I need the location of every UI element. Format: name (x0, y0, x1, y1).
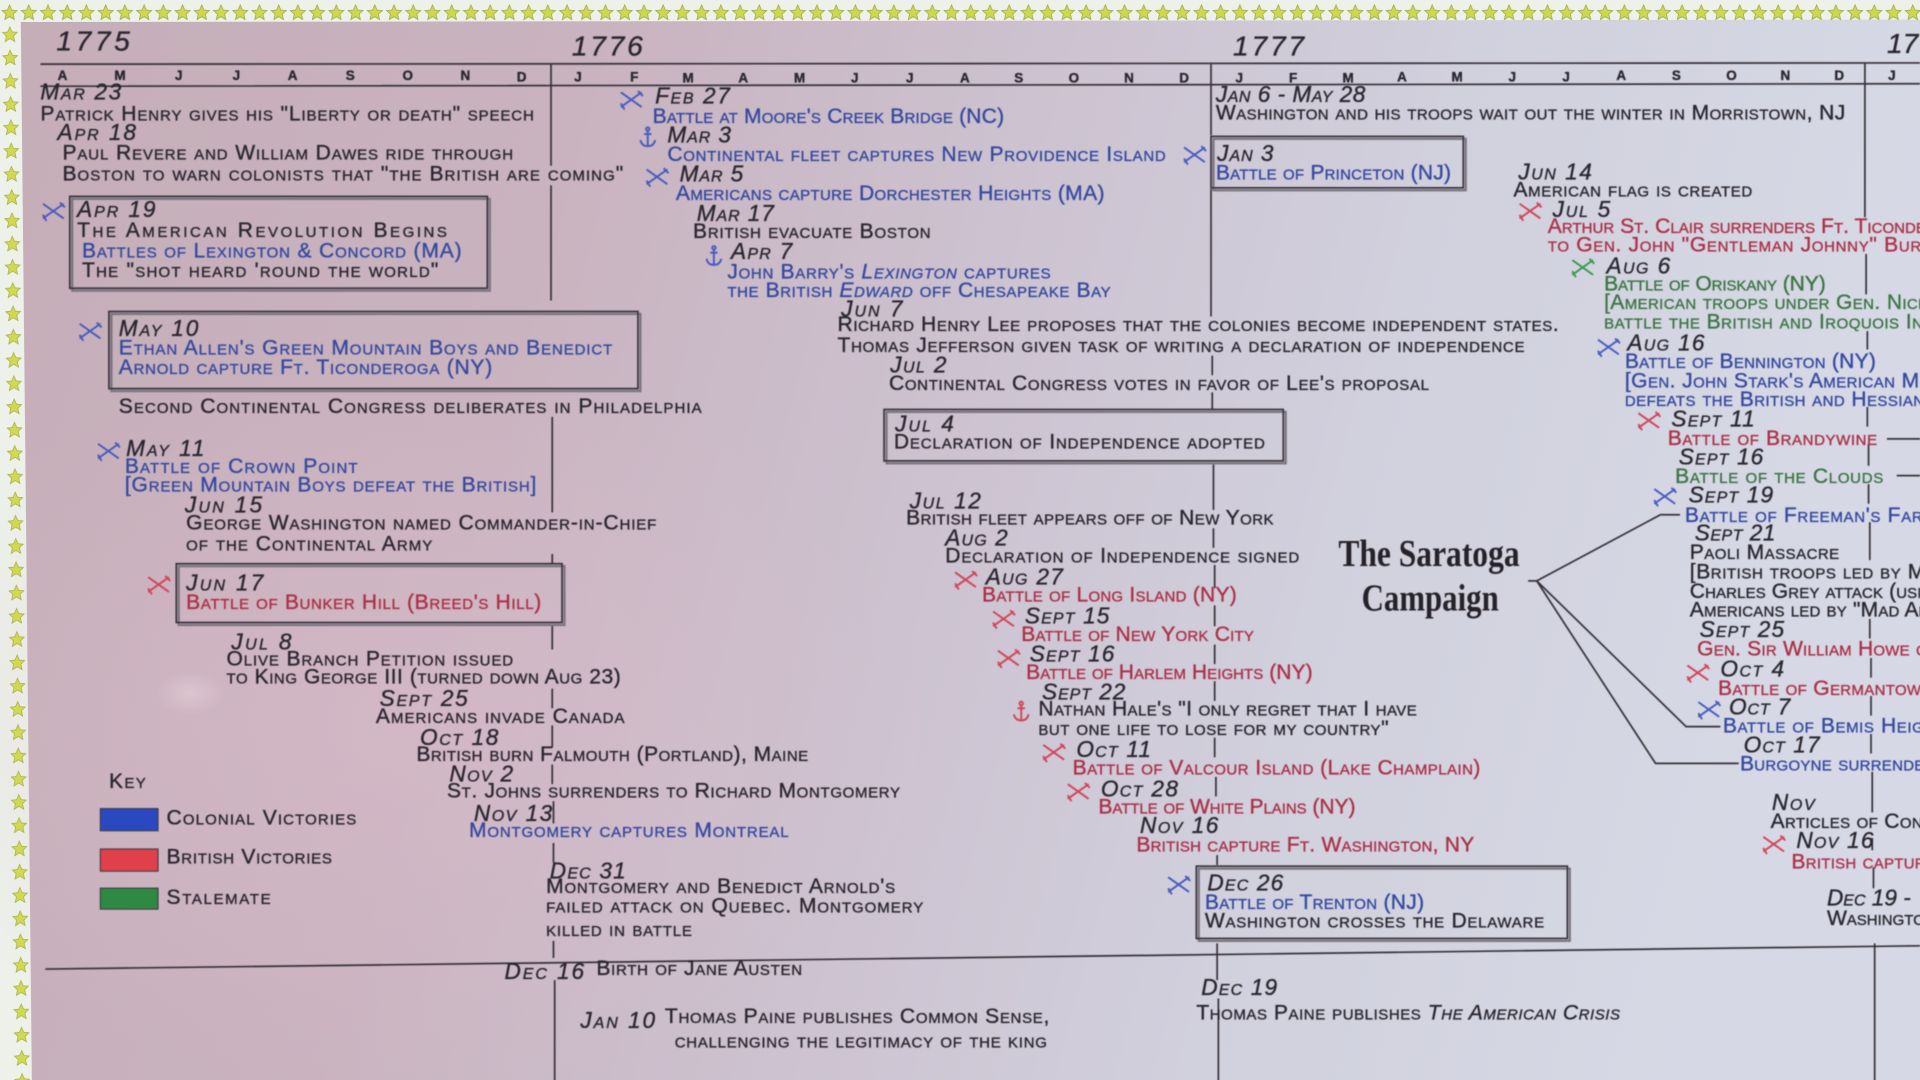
event: Jul 5 (1548, 196, 1920, 257)
text: Second Continental Congress: Second Continental Congress deliberates in Philadelphia (119, 395, 702, 418)
event: Dec 16 birth of Jane Austen: Birth of Jane Austen (596, 957, 802, 980)
icon: blue crossed sabres (1598, 338, 1620, 357)
event: Sept 22: Sept 22 (1042, 679, 1126, 705)
box: Jun 17: Jun 17 (185, 570, 265, 596)
event: Jul 12: British fleet appears off of New York (906, 507, 1273, 530)
year header: 1776 (572, 31, 643, 62)
event: Dec 31: Dec 31 (550, 857, 626, 883)
event: Jun 7: Richard Henry Lee proposes that the colonies become independent states. (838, 313, 1559, 336)
icon: red crossed sabres (1043, 744, 1065, 762)
event: Feb 27: Feb 27 (655, 82, 731, 108)
icon: red crossed sabres (993, 610, 1015, 629)
event: Mar 3: Continental fleet captures New Providence Island (667, 143, 1166, 166)
icon: blue crossed sabres (80, 323, 102, 341)
box: Dec 26: Dec 26 (1207, 870, 1284, 896)
month header: J (851, 71, 858, 86)
event: Oct 18: British burn Falmouth (Portland), Maine (416, 743, 808, 766)
event: Oct 7 (1723, 693, 1920, 738)
event: Sept 21: Sept 21 (1695, 519, 1776, 545)
month header: N (1780, 68, 1790, 83)
box: Jun 17: Battle of Bunker Hill (Breed's Hill) (186, 591, 541, 614)
event: May 11: [Green Mountain Boys defeat the British] (125, 474, 536, 497)
box: Apr 19: The "shot heard 'round the world" (82, 259, 438, 282)
month header: A (1397, 69, 1407, 84)
event: Nov 16 1776: Nov 16 (1140, 812, 1219, 838)
heading: The Saratoga Campaign: The Saratoga (1338, 533, 1520, 575)
month header: M (683, 71, 694, 86)
event: Aug 6: Battle of Oriskany (NY) (1604, 273, 1826, 296)
event: Nov: Nov (1772, 789, 1816, 815)
box: Jul 4: Declaration of Independence adopted (894, 431, 1265, 454)
event: Mar 23 (40, 79, 534, 125)
event: Dec 16 birth of Jane Austen (504, 957, 802, 984)
event: Jul 8: to King George III (turned down Aug 23) (227, 666, 621, 689)
event: Sept 25: Sept 25 (380, 685, 468, 711)
event: Jun 15: Jun 15 (184, 491, 262, 517)
event: Nov 2: Nov 2 (449, 761, 513, 787)
event: Apr 18: Paul Revere and William Dawes ride through (62, 142, 513, 165)
event: Aug 2 (943, 524, 1299, 568)
box: Apr 19: Battles of Lexington & Concord (MA) (82, 240, 462, 263)
arrow: Saratoga connector lines (1528, 515, 1739, 763)
event: Jun 14 (1513, 158, 1752, 201)
month header: J (175, 68, 183, 83)
box: Jul 4: Jul 4 (894, 411, 954, 437)
icon: red anchor (1014, 702, 1029, 720)
icon: red crossed sabres (1763, 836, 1785, 854)
event: Mar 5 (676, 161, 1104, 205)
lower rule (45, 946, 1920, 969)
box: Jan 3: Battle of Princeton (NJ) (1216, 161, 1451, 184)
event: Sept 25 1777: Sept 25 (1700, 616, 1784, 642)
event: Sept 11 (1668, 406, 1877, 450)
box: May 10 (109, 312, 640, 391)
event: Oct 17 (1740, 731, 1920, 776)
event: Sept 11: Battle of Brandywine (1668, 427, 1877, 450)
event: Oct 28 (1098, 775, 1356, 819)
month header: J (1235, 71, 1243, 86)
box: Apr 19: Apr 19 (75, 196, 156, 222)
event: Jul 5: Jul 5 (1552, 196, 1611, 222)
event: Jan 10 Common Sense: Jan 10 (579, 1007, 656, 1033)
month header: A (58, 68, 68, 83)
icon: green crossed sabres (1572, 259, 1594, 277)
icon: blue crossed sabres (1168, 876, 1190, 894)
event: Jul 8: Jul 8 (230, 628, 292, 654)
box: Dec 26: Washington crosses the Delaware (1205, 909, 1544, 932)
year header: 17 (1887, 28, 1920, 59)
event: Mar 17: British evacuate Boston (693, 220, 931, 243)
month header: J (1888, 68, 1896, 83)
event: Jan 6 - May 28: Jan 6 - May 28 (1215, 81, 1366, 107)
event: Sept 15: Sept 15 (1025, 603, 1110, 629)
event: Oct 18: Oct 18 (420, 724, 499, 750)
event: Sept 25: Americans invade Canada (376, 705, 624, 728)
icon: red crossed sabres (955, 571, 977, 589)
event: Sept 16: Sept 16 (1030, 641, 1115, 667)
box: Jun 17 (176, 564, 564, 625)
event: Apr 7 (727, 238, 1111, 302)
month header: D (1834, 68, 1844, 83)
event: Nov 16 1776: British capture Ft. Washington, NY (1136, 834, 1474, 857)
month header: N (1124, 71, 1134, 86)
event: Jul 8: Olive Branch Petition issued (227, 647, 513, 670)
event: Dec 31 (546, 857, 923, 941)
event: Dec 19 American Crisis: Thomas Paine publishes The American Crisis (1196, 1001, 1620, 1024)
event: Jun 14: Jun 14 (1517, 158, 1592, 184)
event: May 11: May 11 (126, 435, 204, 461)
legend: key: Colonial Victories (167, 807, 356, 830)
month header: D (1179, 71, 1189, 86)
event: Mar 3: Mar 3 (667, 122, 731, 148)
icon: red crossed sabres (1520, 203, 1542, 221)
event: Dec 31: Montgomery and Benedict Arnold's (546, 875, 895, 898)
event: Sept 22: Nathan Hale's "I only regret that I have (1038, 698, 1417, 721)
legend: key: Stalemate (167, 886, 271, 909)
month header: O (1726, 68, 1737, 83)
event: Apr 18: Boston to warn colonists that "the British are coming" (62, 162, 623, 185)
event: Sept 21: Paoli Massacre (1690, 541, 1839, 564)
event: Sept 25 (376, 685, 624, 728)
event: Aug 6: Aug 6 (1605, 253, 1671, 279)
event: May 11: Battle of Crown Point (125, 455, 358, 478)
event: Dec 19 (1827, 884, 1920, 930)
box: Apr 19 (70, 196, 490, 291)
event: Apr 7: the British Edward off Chesapeake Bay (727, 279, 1111, 302)
icon: red crossed sabres (1687, 664, 1709, 683)
event: Apr 18 (56, 119, 623, 185)
star border top (0, 4, 1920, 21)
event: Jun 15: George Washington named Commander-in-Chief (186, 511, 656, 534)
event: Oct 11: Oct 11 (1076, 736, 1151, 762)
event: Dec 19 American Crisis: Dec 19 (1201, 974, 1278, 1000)
event: Mar 3 (667, 122, 1166, 166)
month header: A (1616, 68, 1626, 83)
icon: blue anchor (640, 127, 655, 146)
event: May 11 (125, 435, 536, 497)
event: Oct 4 (1718, 655, 1920, 700)
heading: The Saratoga Campaign: Campaign (1362, 577, 1499, 619)
legend: key (100, 770, 356, 909)
event: Sept 16 1777: Sept 16 (1679, 444, 1764, 470)
year header (56, 26, 1920, 62)
box: May 10: Ethan Allen's Green Mountain Boys and Benedict (119, 336, 612, 359)
event: Aug 16: Battle of Bennington (NY) (1625, 350, 1876, 373)
event: Jan 6 - May 28: Washington and his troops wait out the winter in Morristown, NJ (1216, 101, 1845, 124)
month header: M (794, 71, 805, 86)
icon: red crossed sabres (148, 576, 170, 594)
event: Nov 16 1777 (1791, 827, 1920, 874)
warm lighting (0, 343, 931, 1080)
event: Aug 27 (982, 564, 1237, 607)
event: Jun 7: Thomas Jefferson given task of writing a declaration of independence (838, 334, 1524, 357)
event: Oct 11 (1073, 736, 1480, 779)
month header: F (1289, 71, 1297, 86)
event: Jan 10 Common Sense: Thomas Paine publishes Common Sense, (665, 1005, 1049, 1028)
event: Mar 5: Mar 5 (680, 161, 744, 187)
event: Jun 15: of the Continental Army (186, 532, 432, 555)
event: Sept 22: but one life to lose for my country" (1038, 717, 1389, 740)
month header: F (630, 69, 638, 84)
event: Feb 27 (653, 82, 1004, 128)
box: May 10: May 10 (119, 315, 199, 341)
event: Nov 2: St. Johns surrenders to Richard Montgomery (447, 780, 900, 803)
month header: D (517, 69, 527, 84)
month header: M (1452, 69, 1463, 84)
icon: blue crossed sabres (647, 168, 669, 187)
icon: blue crossed sabres (43, 203, 65, 221)
year header: 1777 (1233, 31, 1305, 62)
month header: J (233, 68, 240, 83)
event: Mar 23: Mar 23 (40, 79, 122, 105)
month header: J (1562, 69, 1570, 84)
box: Jan 3: Jan 3 (1216, 140, 1274, 166)
legend: key: British Victories (167, 846, 332, 869)
month header: O (403, 68, 413, 83)
event: Jul 8 (227, 628, 621, 689)
event: Mar 23: Patrick Henry gives his "Liberty or death" speech (40, 102, 534, 125)
month header: J (574, 69, 582, 84)
event: Nov (1771, 789, 1920, 833)
event: Sept 19 (1685, 482, 1920, 527)
event: Jun 7 (838, 295, 1559, 357)
event: Mar 17: Mar 17 (697, 200, 775, 226)
event: Sept 15: Battle of New York City (1021, 623, 1254, 646)
event: Sept 19: Sept 19 (1689, 482, 1773, 508)
event: Dec 31: failed attack on Quebec. Montgomery (546, 895, 923, 918)
event: Jul 2: Continental Congress votes in favor of Lee's proposal (889, 372, 1429, 395)
event: Aug 16 (1625, 330, 1920, 411)
month header: J (1509, 69, 1516, 84)
icon: blue crossed sabres (1698, 701, 1720, 719)
month header (58, 68, 1896, 86)
event: Sept 25 1777 (1697, 616, 1920, 661)
box: May 10: Arnold capture Ft. Ticonderoga (NY) (119, 356, 492, 379)
event: Aug 27: Aug 27 (984, 564, 1064, 590)
event: Sept 16 1777: Battle of the Clouds (1675, 465, 1883, 488)
box: Jan 3 (1211, 136, 1466, 190)
event: Sept 21 (1690, 519, 1920, 621)
event: Dec 19 American Crisis (1196, 974, 1620, 1024)
event: Apr 18: Apr 18 (56, 119, 136, 145)
event: Aug 27: Battle of Long Island (NY) (982, 584, 1237, 607)
month header: A (288, 68, 298, 83)
icon: blue crossed sabres (621, 91, 643, 109)
event: Jan 10 Common Sense: challenging the legitimacy of the king (675, 1029, 1047, 1052)
event: Jan 10 Common Sense (579, 1005, 1049, 1052)
icon: red crossed sabres (998, 649, 1020, 668)
event: Jul 12: Jul 12 (909, 488, 981, 514)
icon: blue anchor (707, 246, 721, 265)
event: Jan 6 - May 28 (1215, 81, 1845, 124)
month header: N (460, 68, 470, 83)
month header: S (1672, 68, 1681, 83)
event: Nov 13: Nov 13 (474, 800, 553, 826)
event: Nov 13 (469, 800, 789, 842)
event: Aug 2: Declaration of Independence signed (945, 545, 1299, 568)
heading: The Saratoga Campaign (1338, 533, 1520, 619)
event: Oct 18 (416, 724, 808, 766)
event: Sept 16 (1026, 641, 1313, 684)
year header: 1775 (56, 26, 130, 57)
event: Jul 2 (889, 352, 1429, 395)
month header: A (738, 71, 748, 86)
event: Oct 11: Battle of Valcour Island (Lake Champlain) (1073, 756, 1480, 779)
event: Nov 16 1777: Nov 16 (1796, 827, 1874, 853)
box: Dec 26 (1196, 866, 1570, 941)
event: Oct 17: Oct 17 (1744, 731, 1821, 757)
event: Sept 15 (1021, 603, 1254, 646)
box: Dec 26: Battle of Trenton (NJ) (1205, 891, 1424, 914)
event: Jul 12 (906, 488, 1273, 530)
month header: S (346, 68, 355, 83)
event: Jun 15 (184, 491, 656, 555)
month header: J (906, 71, 914, 86)
star border left (1, 24, 31, 1080)
month header: S (1014, 71, 1023, 86)
event: Oct 4: Oct 4 (1720, 655, 1784, 681)
event: Sept 16 1777 (1675, 444, 1883, 488)
event: Sept 11: Sept 11 (1671, 406, 1755, 432)
legend: key: Key (109, 770, 146, 793)
event: Nov 2 (447, 761, 900, 803)
event: Aug 2: Aug 2 (943, 524, 1008, 550)
event: Sept 16: Battle of Harlem Heights (NY) (1026, 661, 1313, 684)
event: Aug 6 (1604, 253, 1920, 334)
event: Mar 5: Americans capture Dorchester Heights (MA) (676, 182, 1104, 205)
event: Oct 7: Oct 7 (1729, 693, 1792, 719)
event: Oct 28: Battle of White Plains (NY) (1098, 796, 1356, 819)
icon: red crossed sabres (1638, 412, 1660, 430)
event: Apr 7: John Barry's Lexington captures (727, 260, 1051, 283)
icon: blue crossed sabres (1184, 146, 1206, 165)
month header: O (1069, 71, 1079, 86)
icon: red crossed sabres (1068, 783, 1090, 801)
box: Apr 19: The American Revolution Begins (77, 219, 447, 242)
icon: blue crossed sabres (98, 443, 120, 461)
event: Nov 16 1776 (1136, 812, 1474, 857)
month header: M (1343, 71, 1354, 86)
glare spot (156, 671, 224, 715)
event: Oct 28: Oct 28 (1101, 775, 1178, 801)
event: Jul 2: Jul 2 (889, 352, 947, 378)
event: Dec 16 birth of Jane Austen: Dec 16 (504, 958, 584, 984)
event: Dec 31: killed in battle (546, 918, 692, 941)
event: Aug 16: Aug 16 (1625, 330, 1705, 356)
event: Sept 22 (1038, 679, 1417, 740)
month header: M (114, 68, 126, 83)
box: Jul 4 (884, 409, 1286, 463)
event: Dec 19: Dec 19 - (1827, 884, 1911, 910)
event: Mar 17 (693, 200, 931, 243)
event: Apr 7: Apr 7 (729, 238, 794, 264)
icon: blue crossed sabres (1654, 488, 1676, 506)
event: Jun 7: Jun 7 (840, 295, 904, 321)
event: Nov 13: Montgomery captures Montreal (469, 819, 789, 842)
event: Feb 27: Battle at Moore's Creek Bridge (NC) (653, 105, 1004, 128)
month header: A (960, 71, 970, 86)
event: Jun 14: American flag is created (1513, 178, 1752, 201)
